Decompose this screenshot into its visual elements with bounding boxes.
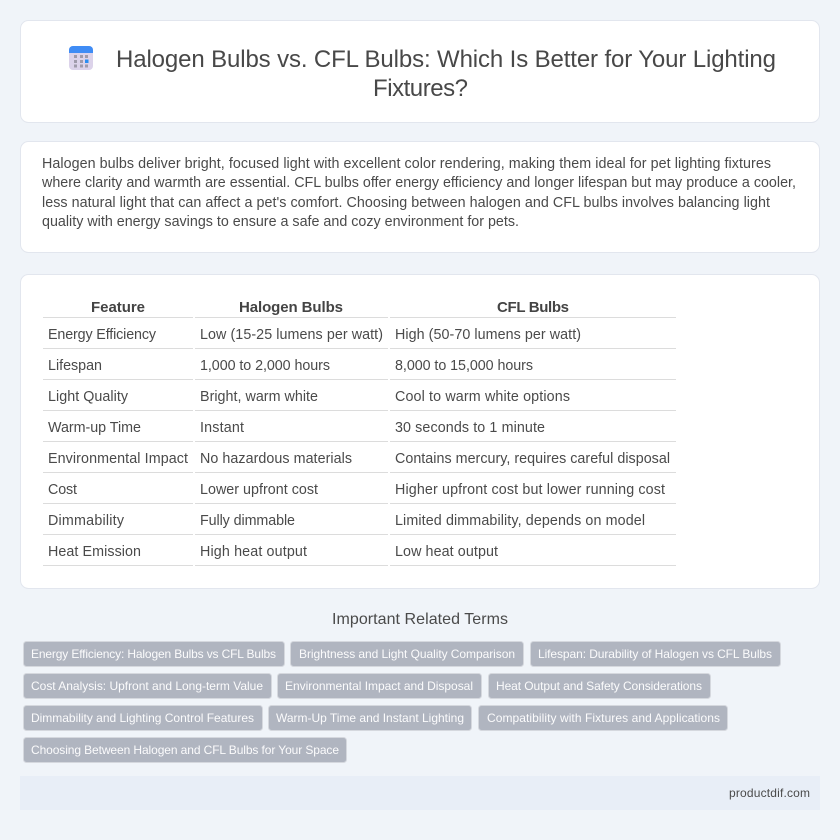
row: lifespan bbox=[48, 358, 533, 374]
row: warm-up time: 30 seconds to 1 minute bbox=[395, 420, 545, 436]
row: energy efficiency bbox=[48, 327, 581, 343]
row: environmental impact: Contains mercury, requires careful disposal bbox=[395, 451, 670, 467]
title bbox=[116, 46, 776, 102]
panel: intro paragraph: quality with energy savings to ensure a safe and cozy environment for pets. bbox=[42, 214, 519, 230]
table header row bbox=[91, 299, 569, 316]
panel: header bbox=[20, 20, 820, 122]
row: cost bbox=[48, 482, 665, 498]
panel: intro paragraph: Halogen bulbs deliver bright, focused light with excellent color rendering, making them ideal for pet lighting fixtures bbox=[42, 156, 771, 172]
row: environmental impact: No hazardous materials bbox=[200, 451, 352, 467]
row: lifespan: 8,000 to 15,000 hours bbox=[395, 358, 533, 374]
related terms tags: Choosing Between Halogen and CFL Bulbs for Your Space bbox=[31, 743, 339, 757]
panel: intro paragraph: where clarity and warmth are essential. CFL bulbs offer energy efficiency and longer lifespan but may produce a cooler, bbox=[41, 175, 796, 191]
related terms tags bbox=[24, 642, 780, 762]
icon: calendar bbox=[69, 46, 93, 70]
row: cost: Higher upfront cost but lower running cost bbox=[395, 482, 665, 498]
table header row: CFL Bulbs bbox=[497, 299, 569, 316]
row: light quality: Light Quality bbox=[48, 389, 129, 405]
related terms tags: Warm-Up Time and Instant Lighting bbox=[276, 711, 464, 725]
row: environmental impact bbox=[48, 451, 670, 467]
row: environmental impact: Environmental Impact bbox=[48, 451, 188, 467]
related terms tags: Heat Output and Safety Considerations bbox=[496, 679, 702, 693]
related terms tags: Brightness and Light Quality Comparison bbox=[299, 647, 515, 661]
panel: comparison table bbox=[20, 274, 820, 588]
title: Fixtures? bbox=[373, 75, 468, 102]
row: cost: Cost bbox=[48, 482, 77, 498]
row: energy efficiency: Energy Efficiency bbox=[48, 327, 157, 343]
row: cost: Lower upfront cost bbox=[200, 482, 318, 498]
row: energy efficiency: High (50-70 lumens per watt) bbox=[395, 327, 581, 343]
panel: intro paragraph: less natural light that can affect a pet's comfort. Choosing between halogen and CFL bulbs involves balancing light bbox=[42, 195, 770, 211]
row: dimmability bbox=[48, 513, 645, 529]
footer: productdif.com bbox=[729, 786, 810, 800]
related terms tags: Energy Efficiency: Halogen Bulbs vs CFL Bulbs bbox=[31, 647, 276, 661]
row: heat emission: Heat Emission bbox=[48, 544, 141, 560]
row: lifespan: 1,000 to 2,000 hours bbox=[200, 358, 330, 374]
row: warm-up time: Warm-up Time bbox=[48, 420, 141, 436]
row: dimmability: Dimmability bbox=[48, 513, 125, 529]
related terms tags: Compatibility with Fixtures and Applications bbox=[487, 711, 720, 725]
title: Halogen Bulbs vs. CFL Bulbs: Which Is Better for Your Lighting bbox=[116, 46, 776, 73]
row: heat emission: High heat output bbox=[200, 544, 307, 560]
table header row: Feature bbox=[91, 299, 145, 316]
row: lifespan: Lifespan bbox=[48, 358, 102, 374]
related terms tags: Lifespan: Durability of Halogen vs CFL Bulbs bbox=[538, 647, 772, 661]
row: dimmability: Limited dimmability, depends on model bbox=[395, 513, 645, 529]
row: energy efficiency: Low (15-25 lumens per watt) bbox=[200, 327, 383, 343]
row: light quality: Bright, warm white bbox=[200, 389, 318, 405]
panel: intro paragraph bbox=[20, 142, 820, 252]
row: warm-up time bbox=[48, 420, 545, 436]
row: warm-up time: Instant bbox=[200, 420, 244, 436]
row: heat emission bbox=[48, 544, 498, 560]
related terms tags: Environmental Impact and Disposal bbox=[285, 679, 473, 693]
table header row: Halogen Bulbs bbox=[239, 299, 343, 316]
heading: important related terms: Important Related Terms bbox=[332, 611, 508, 628]
row: light quality: Cool to warm white options bbox=[395, 389, 570, 405]
row: light quality bbox=[48, 389, 570, 405]
related terms tags: Cost Analysis: Upfront and Long-term Value bbox=[31, 679, 263, 693]
row: dimmability: Fully dimmable bbox=[200, 513, 295, 529]
footer bbox=[20, 776, 820, 810]
related terms tags: Dimmability and Lighting Control Features bbox=[31, 711, 254, 725]
row: heat emission: Low heat output bbox=[395, 544, 498, 560]
